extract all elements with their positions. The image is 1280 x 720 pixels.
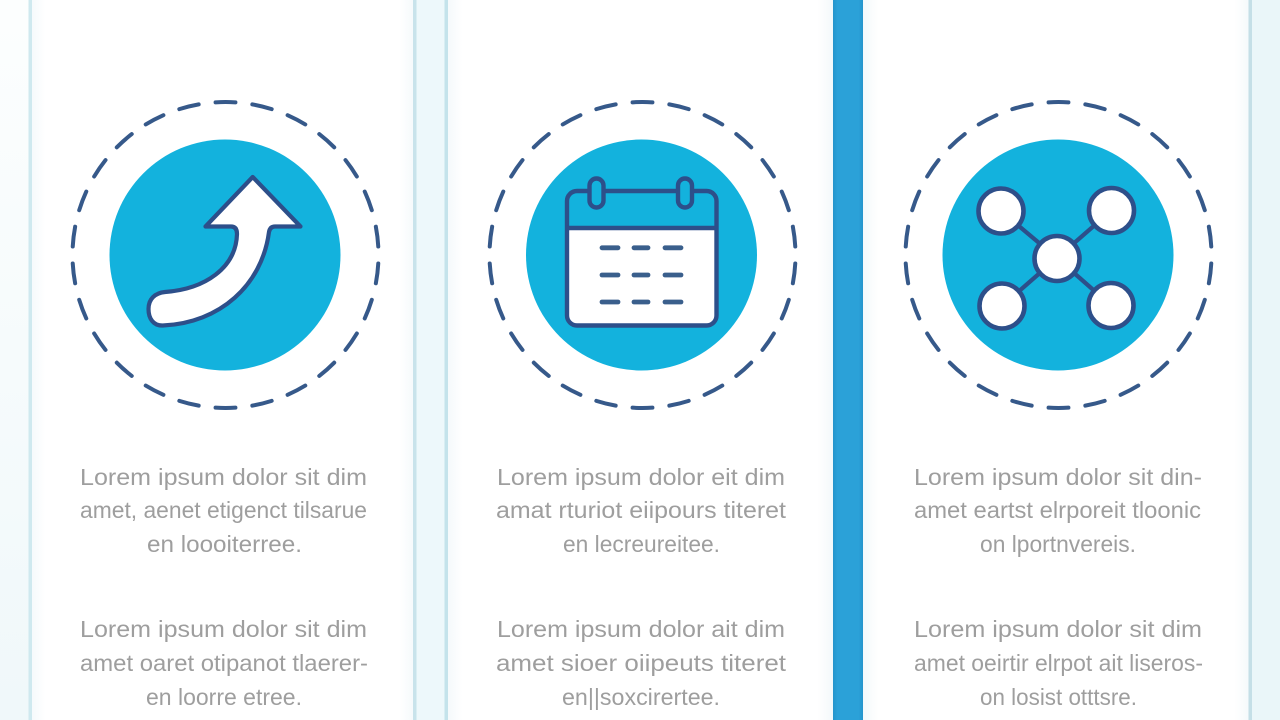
text block: third column upper: Lorem ipsum dolor sit din- (914, 464, 1202, 490)
icon: dashed ring and arrow badge (72, 102, 378, 408)
icon: dashed ring and network badge (906, 102, 1212, 408)
text block: second column lower: amet sioer oiipeuts titeret (496, 650, 787, 676)
text block: third column lower: Lorem ipsum dolor sit dim (914, 616, 1202, 642)
text block: second column upper (496, 464, 787, 557)
icon: calendar (567, 178, 716, 326)
text block: third column lower: amet oeirtir elrpot ait liseros- (914, 650, 1203, 676)
text block: first column upper: Lorem ipsum dolor sit dim (80, 464, 367, 490)
icon: curved up arrow (148, 177, 300, 326)
text block: second column upper: amat rturiot eiipours titeret (496, 497, 787, 523)
text block: third column upper (914, 464, 1202, 557)
text block: first column lower: amet oaret otipanot tlaerer- (80, 650, 368, 676)
icon: dashed ring and calendar badge (490, 102, 796, 408)
text block: second column upper: Lorem ipsum dolor eit dim (497, 464, 785, 490)
icon: network nodes (978, 188, 1134, 328)
vertical blue band (833, 0, 863, 720)
panel: first column (28, 0, 416, 720)
text block: first column lower: en loorre etree. (146, 684, 302, 710)
text block: first column upper: amet, aenet etigenct tilsarue (80, 497, 367, 523)
gap between panels one and two (415, 0, 447, 720)
text block: second column lower: en||soxcirertee. (562, 684, 720, 710)
panel: third column (863, 0, 1252, 720)
right margin strip (1250, 0, 1280, 720)
text block: second column lower (496, 616, 787, 710)
panel: second column (444, 0, 833, 720)
text block: first column lower: Lorem ipsum dolor sit dim (80, 616, 367, 642)
text block: second column upper: en lecreureitee. (563, 531, 720, 557)
text block: third column lower (914, 616, 1203, 710)
text block: third column upper: amet eartst elrporeit tloonic (914, 497, 1201, 523)
text block: third column lower: on losist otttsre. (980, 684, 1137, 710)
text block: third column upper: on lportnvereis. (980, 531, 1136, 557)
text block: first column lower (80, 616, 368, 710)
text block: first column upper: en loooiterree. (147, 531, 302, 557)
text block: first column upper (80, 464, 367, 557)
text block: second column lower: Lorem ipsum dolor ait dim (497, 616, 785, 642)
